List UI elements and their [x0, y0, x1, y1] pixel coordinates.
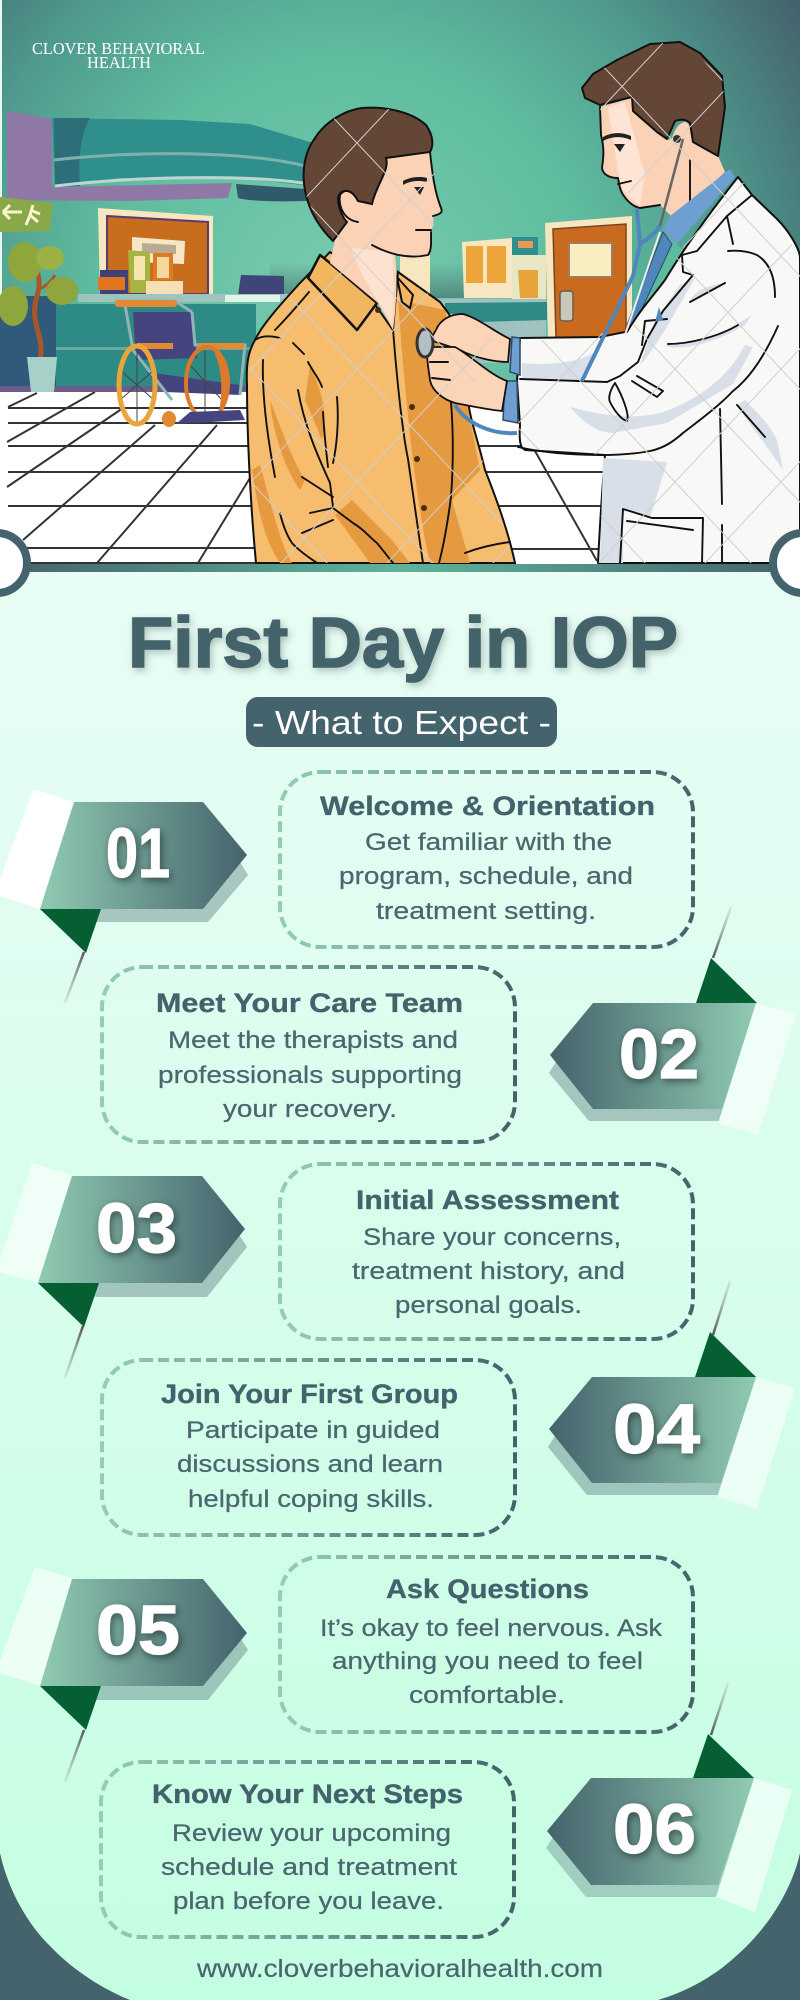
step 6 badge: 06: [613, 1790, 696, 1868]
step 4 badge: [548, 1281, 795, 1509]
bulletin board: [98, 208, 213, 295]
step 6 card: Review your upcoming: [172, 1820, 451, 1847]
step 3 badge: 03: [96, 1189, 177, 1267]
curved teal soffit: [52, 118, 320, 201]
stethoscope lower tube: [455, 405, 517, 433]
clinic name logo: CLOVER BEHAVIORAL: [32, 39, 205, 58]
watermark lattice over figures: [240, 30, 800, 564]
patient: [247, 108, 515, 563]
step 3 card: personal goals.: [395, 1292, 582, 1319]
plant: [0, 242, 78, 392]
step 3: [0, 1163, 693, 1378]
doctor cuffs: [503, 337, 520, 423]
subtitle pill: [246, 697, 557, 747]
step 2 card: Meet the therapists and: [168, 1027, 458, 1054]
step 1: [0, 772, 693, 1003]
right ring: [773, 533, 800, 593]
step 1 card: Get familiar with the: [365, 829, 612, 856]
doctor hair: [582, 42, 725, 156]
step 6 card: plan before you leave.: [173, 1888, 444, 1915]
step 4 card: helpful coping skills.: [188, 1486, 434, 1513]
step 2 badge: 02: [619, 1015, 699, 1093]
patient mouth: [416, 229, 431, 231]
step 6 card: schedule and treatment: [161, 1854, 457, 1881]
step 5 badge: [0, 1567, 248, 1782]
back posters and door: [400, 216, 632, 363]
doctor neck and face: [600, 97, 725, 220]
subtitle pill: - What to Expect -: [252, 704, 551, 741]
step 1 card: [280, 772, 693, 947]
step 1 card: treatment setting.: [376, 898, 596, 925]
step 2 card: Meet Your Care Team: [156, 988, 463, 1018]
left ring: [0, 533, 27, 593]
step 6: [101, 1683, 792, 1937]
doctor blue collar and tie: [627, 169, 735, 328]
patient hair: [304, 108, 432, 241]
step 5 card: It’s okay to feel nervous. Ask: [320, 1615, 663, 1642]
patient shirt: [247, 252, 515, 563]
website footer: www.cloverbehavioralhealth.com: [196, 1955, 603, 1983]
left white edge: [0, 0, 2, 392]
step 3 card: Initial Assessment: [356, 1185, 619, 1215]
exit sign: [0, 197, 53, 232]
step 5: [0, 1557, 693, 1782]
doctor coat: [517, 177, 800, 563]
step 2 card: your recovery.: [223, 1096, 397, 1123]
step 4 card: discussions and learn: [177, 1451, 443, 1478]
doctor scrub green: [635, 232, 683, 315]
step 5 card: anything you need to feel: [332, 1648, 643, 1675]
doctor eye and brow: [603, 133, 631, 152]
divider bar: [0, 564, 800, 572]
patient eye and brow: [403, 177, 427, 195]
step 3 badge: [0, 1163, 247, 1378]
stethoscope chest piece: [417, 329, 433, 357]
wall background: [0, 0, 800, 400]
step 2 badge: [549, 907, 796, 1135]
page background: [0, 560, 800, 2000]
stethoscope tubing: [582, 135, 683, 381]
doctor mouth: [618, 181, 631, 184]
wheelchair: [115, 300, 245, 427]
step 1 badge: [0, 789, 248, 1003]
patient neck and face: [330, 152, 442, 330]
step 1 card: Welcome & Orientation: [320, 791, 655, 821]
reception counter: [0, 294, 300, 392]
step 2 card: [102, 967, 515, 1142]
step 1 badge: 01: [106, 814, 170, 892]
step 6 card: Know Your Next Steps: [152, 1779, 463, 1809]
step 5 card: comfortable.: [409, 1682, 565, 1709]
step 6 badge: [546, 1683, 792, 1912]
step 3 card: treatment history, and: [352, 1258, 625, 1285]
hero illustration: [0, 0, 800, 564]
step 5 badge: 05: [96, 1591, 180, 1669]
step 4 badge: 04: [613, 1390, 700, 1468]
bottom corner curves: [0, 1853, 800, 2000]
step 6 card: [101, 1762, 514, 1937]
step 5 card: Ask Questions: [386, 1574, 589, 1604]
doctor: [417, 42, 800, 563]
step 5 card: [280, 1557, 693, 1732]
wall shadow at counter height: [270, 262, 470, 298]
step 4 card: [102, 1360, 515, 1535]
doctor hands: [427, 314, 510, 411]
step 3 card: [280, 1164, 693, 1339]
purple ceiling panel: [7, 111, 232, 201]
step 1 card: program, schedule, and: [339, 863, 633, 890]
step 2 card: professionals supporting: [158, 1062, 462, 1089]
monitor: [238, 275, 284, 295]
step 4 card: Join Your First Group: [161, 1379, 458, 1409]
title: First Day in IOP: [128, 604, 678, 683]
floor: [0, 392, 800, 564]
step 3 card: Share your concerns,: [363, 1224, 621, 1251]
clinic name logo: HEALTH: [87, 53, 151, 72]
clinic name logo: [32, 39, 205, 72]
step 4: [102, 1281, 795, 1535]
step 2: [102, 907, 796, 1142]
patient ear line: [340, 191, 358, 222]
step 4 card: Participate in guided: [186, 1417, 440, 1444]
